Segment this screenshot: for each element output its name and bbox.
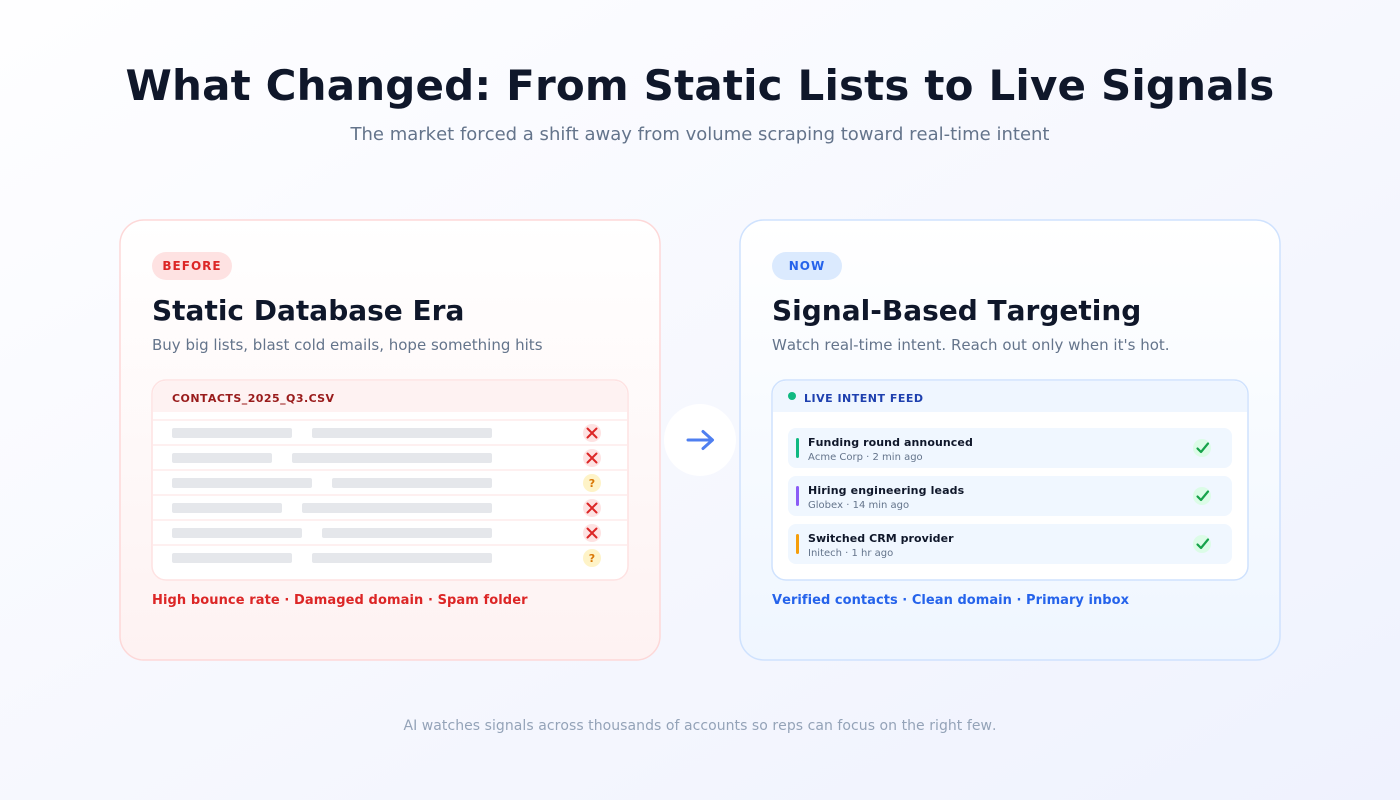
heading: static database era: Static Database Era [152,294,464,327]
title: What Changed: From Static Lists to Live Signals [126,61,1274,110]
live dot [788,392,796,400]
csv table [151,379,629,581]
outcome: now: Verified contacts · Clean domain · Primary inbox [772,593,1129,608]
badge: before [152,252,232,280]
heading: signal-based targeting: Signal-Based Targeting [772,294,1141,327]
icon: cross [583,524,601,542]
badge: now [772,252,842,280]
feed item: funding: Acme Corp · 2 min ago [808,452,923,463]
arrow [664,404,736,476]
panel: before [119,219,661,661]
badge: before: BEFORE [162,259,222,273]
icon: cross [583,449,601,467]
feed item: funding: Funding round announced [808,436,973,449]
feed item: hiring: Hiring engineering leads [808,484,964,497]
feed item: crm: Initech · 1 hr ago [808,548,893,559]
feed item: hiring [788,476,1232,516]
footer note: AI watches signals across thousands of accounts so reps can focus on the right few. [403,718,996,734]
table header: CONTACTS_2025_Q3.CSV [172,392,334,405]
feed header: LIVE INTENT FEED [804,392,924,405]
icon: question [583,474,601,492]
icon: cross [583,499,601,517]
description: now: Watch real-time intent. Reach out only when it's hot. [772,336,1170,354]
badge: now: NOW [789,259,825,273]
icon: question: ? [589,477,595,490]
feed item: crm [788,524,1232,564]
feed item: funding [788,428,1232,468]
feed item: hiring: Globex · 14 min ago [808,500,909,511]
live feed [771,379,1249,581]
feed item: crm: Switched CRM provider [808,532,954,545]
icon: cross [583,424,601,442]
icon: question: ? [589,552,595,565]
subtitle: The market forced a shift away from volume scraping toward real-time intent [350,124,1050,145]
description: before: Buy big lists, blast cold emails, hope something hits [152,336,543,354]
row bars [172,428,492,563]
icon: question [583,549,601,567]
panel: now [739,219,1281,661]
outcome: before: High bounce rate · Damaged domain · Spam folder [152,593,528,608]
